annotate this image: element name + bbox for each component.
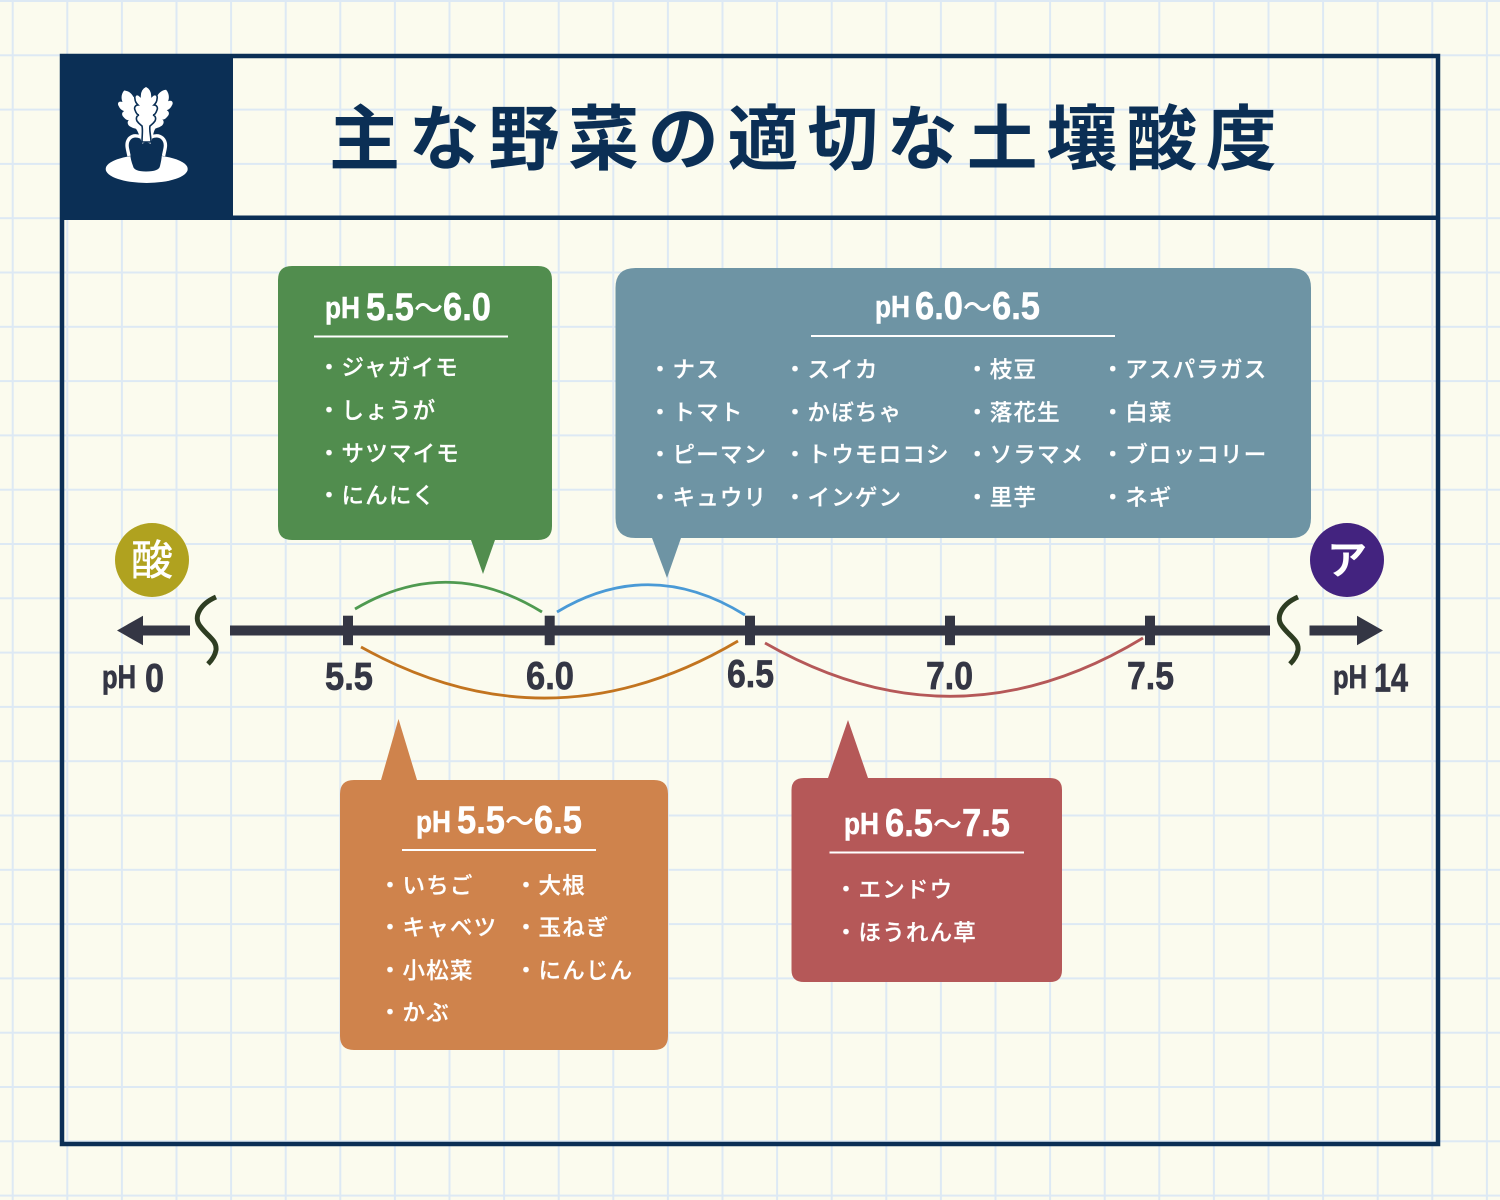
axis label: 7.0: 7.0: [926, 655, 973, 698]
heading: pH 6.0-6.5: 6.0: [915, 285, 963, 328]
heading: pH 5.5-6.5: 〜: [505, 806, 534, 839]
alkali badge: [1310, 523, 1384, 597]
label: pH 14: [1333, 656, 1409, 700]
vegetable list: ・大根: [515, 873, 586, 898]
panel: pH 6.5-7.5: [792, 720, 1062, 982]
heading: pH 5.5-6.0: 6.0: [443, 286, 491, 329]
heading: pH 5.5-6.0: 5.5: [366, 286, 414, 329]
vegetable list: ・ピーマン: [649, 442, 767, 467]
heading: pH 6.0-6.5: [875, 285, 1040, 328]
vegetable list: ・ジャガイモ: [318, 356, 459, 380]
heading: pH 5.5-6.5: 6.5: [534, 799, 582, 842]
panel: pH 6.0-6.5: [616, 268, 1311, 578]
vegetable list: [835, 878, 977, 946]
acid badge: 酸: [131, 537, 173, 584]
label: pH 14: 14: [1374, 656, 1409, 700]
header divider: [60, 216, 1440, 220]
vegetable list: ・アスパラガス: [1102, 357, 1267, 382]
heading: pH 5.5-6.5: pH: [416, 804, 451, 839]
header icon panel: [60, 54, 233, 220]
title: 主な野菜の適切な土壤酸度: [329, 101, 1285, 180]
heading: pH 6.5-7.5: pH: [844, 806, 879, 841]
vegetable list: ・ソラマメ: [966, 442, 1085, 467]
heading: pH 5.5-6.0: pH: [325, 290, 360, 325]
heading: pH 5.5-6.5: 5.5: [457, 799, 505, 842]
vegetable list: ・枝豆: [966, 357, 1037, 382]
arrow: toward alkaline: [1310, 616, 1383, 645]
vegetable list: ・ブロッコリー: [1102, 441, 1267, 467]
axis break: left: [197, 597, 216, 664]
axis line: [230, 616, 1270, 645]
vegetable list: ・ほうれん草: [835, 920, 977, 946]
vegetable list: ・インゲン: [784, 485, 902, 510]
vegetable list: ・小松菜: [379, 958, 474, 983]
axis break: right: [1279, 597, 1298, 664]
heading: pH 5.5-6.5: [416, 799, 582, 842]
panel: pH 5.5-6.0: [278, 266, 552, 574]
heading: pH 6.0-6.5: 〜: [963, 292, 992, 325]
heading: pH 5.5-6.0: [325, 286, 491, 329]
vegetable list: ・サツマイモ: [318, 442, 460, 466]
vegetable list: ・キャベツ: [379, 915, 497, 940]
vegetable list: ・いちご: [379, 873, 474, 898]
vegetable list: ・かぼちゃ: [784, 400, 902, 425]
vegetable list: ・落花生: [966, 400, 1061, 425]
vegetable list: ・にんにく: [318, 484, 436, 508]
heading: pH 6.5-7.5: 〜: [933, 809, 962, 842]
vegetable list: ・にんじん: [515, 958, 633, 983]
vegetable list: ・かぶ: [379, 1000, 450, 1025]
vegetable list: ・トウモロコシ: [784, 442, 950, 467]
vegetable list: [379, 873, 633, 1025]
vegetable list: ・玉ねぎ: [515, 915, 610, 940]
heading: pH 6.5-7.5: 7.5: [962, 802, 1010, 845]
panel: pH 5.5-6.5: [340, 719, 668, 1050]
axis label: 6.5: 6.5: [727, 653, 774, 696]
label: pH 0: 0: [145, 656, 164, 700]
vegetable list: ・スイカ: [784, 357, 879, 382]
arrow: toward acid: [117, 616, 190, 645]
label: pH 14: pH: [1333, 659, 1367, 695]
vegetable list: ・キュウリ: [649, 485, 767, 510]
axis label: 6.0: 6.0: [526, 655, 574, 698]
vegetable list: ・白菜: [1102, 400, 1173, 425]
label: pH 0: pH: [102, 659, 136, 695]
alkali badge: ア: [1327, 539, 1367, 583]
vegetable list: ・しょうが: [318, 398, 436, 424]
heading: pH 6.5-7.5: [844, 802, 1010, 845]
axis label: 5.5: 5.5: [325, 656, 373, 698]
vegetable list: ・里芋: [966, 485, 1037, 510]
axis label: 7.5: 7.5: [1127, 655, 1174, 698]
vegetable list: ・ナス: [649, 357, 720, 382]
vegetable list: ・トマト: [649, 400, 744, 425]
icon: carrot on plate: [106, 86, 188, 183]
arc: pH 6.0-6.5: [557, 585, 745, 615]
acid badge: [115, 523, 189, 597]
arc: pH 5.5-6.5: [361, 641, 738, 698]
heading: pH 6.0-6.5: 6.5: [992, 285, 1040, 328]
vegetable list: [318, 356, 460, 508]
arc: pH 6.5-7.5: [765, 638, 1143, 696]
arc: pH 5.5-6.0: [355, 582, 542, 612]
vegetable list: ・ネギ: [1102, 485, 1173, 510]
heading: pH 5.5-6.0: 〜: [414, 293, 443, 326]
vegetable list: ・エンドウ: [835, 878, 953, 902]
vegetable list: [649, 357, 1267, 510]
heading: pH 6.5-7.5: 6.5: [885, 802, 933, 845]
heading: pH 6.0-6.5: pH: [875, 289, 910, 324]
label: pH 0: [102, 656, 164, 700]
